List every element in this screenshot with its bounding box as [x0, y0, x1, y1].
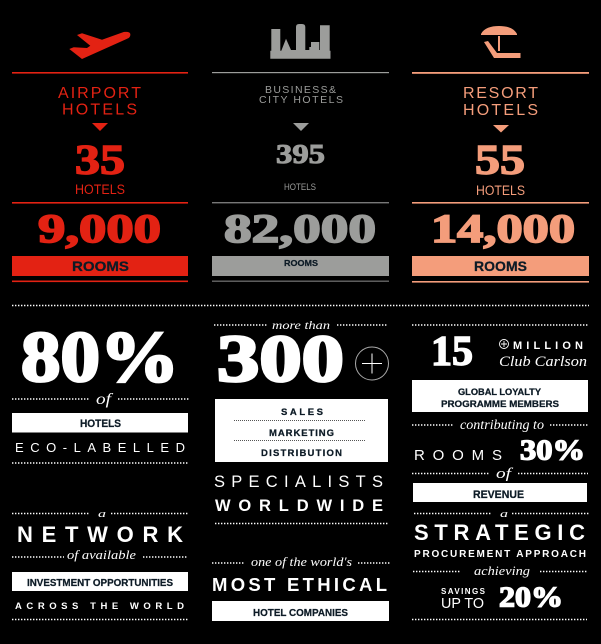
panel: eco-labelled: [12, 317, 189, 463]
label box: global loyalty programme members: GLOBAL LOYALTY: [458, 387, 542, 398]
number: 9,000 rooms: 9,000: [38, 206, 161, 251]
bar: rooms: [412, 256, 589, 276]
panel: business and city hotels: [212, 24, 389, 282]
connector: of available: of available: [67, 547, 136, 562]
connector: of: of: [96, 391, 114, 408]
box: departments: SALES: [281, 407, 323, 418]
number: 300: 300: [217, 322, 344, 396]
bar: rooms: ROOMS: [474, 258, 527, 274]
label box: investment opportunities: INVESTMENT OPPORTUNITIES: [27, 578, 173, 589]
panel: airport hotels: [12, 32, 188, 282]
connector: a: a: [500, 508, 509, 520]
text: savings: SAVINGS: [441, 587, 486, 596]
text: worldwide: WORLDWIDE: [215, 497, 383, 515]
label: hotels: HOTELS: [476, 183, 525, 198]
label box: hotel companies: [212, 601, 389, 621]
number: 80 percent: 80%: [21, 317, 179, 397]
bar: rooms: ROOMS: [72, 258, 129, 274]
number: 15: 15: [431, 329, 473, 375]
panel: most ethical: [212, 554, 390, 621]
label: hotels: HOTELS: [284, 182, 316, 193]
connector: more than: more than: [272, 318, 330, 332]
text: procurement approach: PROCUREMENT APPROACH: [414, 549, 586, 560]
icon: airplane: [69, 32, 130, 59]
label box: hotels: HOTELS: [80, 418, 121, 430]
box: departments: [215, 399, 388, 462]
heading: business and city hotels: CITY HOTELS: [259, 94, 343, 106]
panel: resort hotels: [412, 26, 589, 283]
icon: plus in circle: [356, 347, 388, 380]
label box: revenue: [413, 483, 587, 502]
bar: rooms: [12, 256, 188, 276]
heading: strategic: STRATEGIC: [414, 520, 585, 545]
number: 20 percent: 20%: [499, 582, 563, 614]
text: eco-labelled: ECO-LABELLED: [15, 440, 185, 455]
connector: contributing to: contributing to: [460, 417, 544, 432]
icon: arrow down: [92, 123, 108, 131]
connector: of: of: [496, 466, 513, 482]
label box: investment opportunities: [12, 572, 188, 591]
icon: small plus in circle: [500, 340, 508, 348]
number: 30 percent: 30%: [520, 436, 585, 466]
box: departments: MARKETING: [269, 428, 334, 439]
heading: airport hotels: HOTELS: [62, 102, 137, 118]
label box: global loyalty programme members: [412, 380, 588, 412]
text: across the world: ACROSS THE WORLD: [15, 601, 184, 612]
text: club carlson: Club Carlson: [499, 354, 587, 370]
number: 14,000 rooms: 14,000: [431, 206, 575, 251]
panel: rooms revenue: [412, 417, 588, 502]
label box: revenue: REVENUE: [473, 489, 524, 501]
number: 395 hotels: 395: [276, 139, 325, 169]
number: 35 hotels: 35: [75, 138, 125, 184]
number: 82,000 rooms: 82,000: [224, 206, 376, 251]
label box: hotels: [12, 413, 188, 432]
panel: investment network: [12, 508, 188, 620]
icon: arrow down: [493, 125, 509, 132]
panel: specialists: [214, 318, 388, 524]
box: departments: DISTRIBUTION: [261, 448, 342, 459]
panel: procurement: [412, 508, 589, 620]
icon: city skyline: [270, 24, 330, 59]
bar: rooms: [212, 256, 389, 276]
heading: most ethical: MOST ETHICAL: [212, 574, 387, 595]
heading: resort hotels: RESORT: [463, 85, 538, 102]
connector: a: a: [98, 508, 107, 520]
connector: achieving: achieving: [474, 563, 531, 578]
label: hotels: HOTELS: [75, 182, 125, 197]
heading: resort hotels: HOTELS: [463, 102, 538, 119]
label box: global loyalty programme members: PROGRAMME MEMBERS: [441, 399, 559, 410]
text: up to: UP TO: [441, 595, 484, 612]
text: million: MILLION: [513, 340, 583, 352]
text: rooms: ROOMS: [414, 447, 502, 464]
icon: arrow down: [293, 123, 309, 131]
icon: beach umbrella and lounger: [481, 26, 520, 58]
text: specialists: SPECIALISTS: [214, 473, 383, 491]
label box: hotel companies: HOTEL COMPANIES: [253, 607, 348, 619]
number: 55 hotels: 55: [475, 138, 525, 184]
heading: network: NETWORK: [17, 522, 183, 547]
bar: rooms: ROOMS: [284, 258, 318, 268]
heading: business and city hotels: BUSINESS&: [265, 84, 336, 96]
panel: club carlson: [412, 325, 588, 412]
heading: airport hotels: AIRPORT: [58, 85, 141, 102]
connector: one of the world's: one of the world's: [251, 554, 352, 569]
